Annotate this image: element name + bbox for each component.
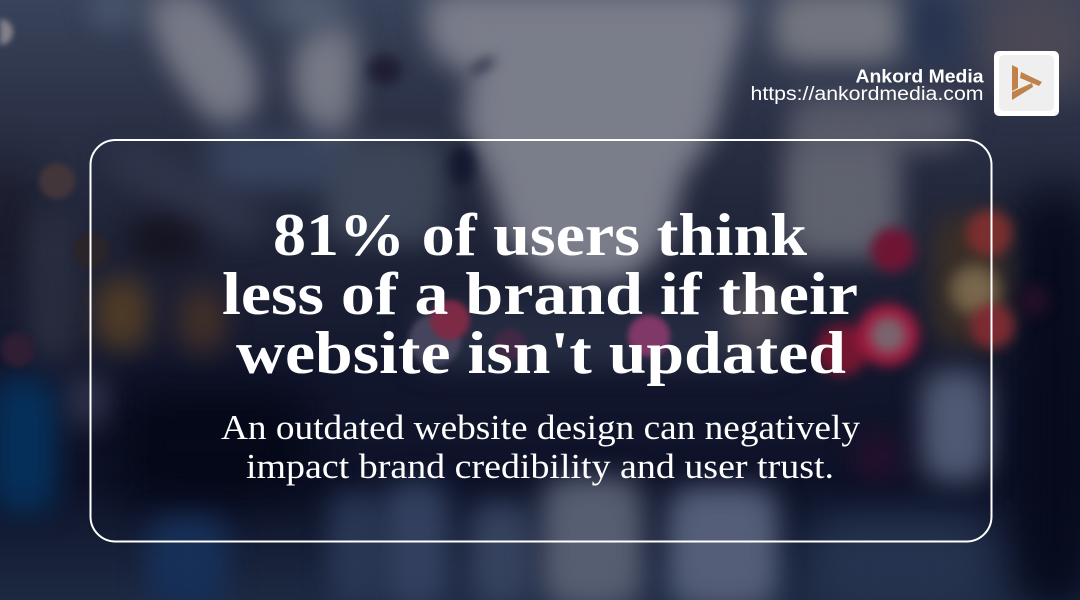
logo badge: [994, 51, 1059, 116]
title: [222, 202, 858, 386]
brand url: https://ankordmedia.com: [750, 84, 984, 105]
panel: headline frame: [90, 140, 992, 542]
subtitle: [221, 408, 861, 486]
subtitle: An outdated website design can negatively: [221, 408, 861, 447]
brand header: [750, 66, 985, 105]
title: less of a brand if their: [222, 261, 858, 327]
subtitle: impact brand credibility and user trust.: [246, 447, 834, 486]
title: website isn't updated: [236, 320, 846, 386]
brand name: Ankord Media: [856, 66, 985, 86]
title: 81% of users think: [273, 202, 808, 268]
icon: play triangle mark: [1012, 65, 1042, 100]
